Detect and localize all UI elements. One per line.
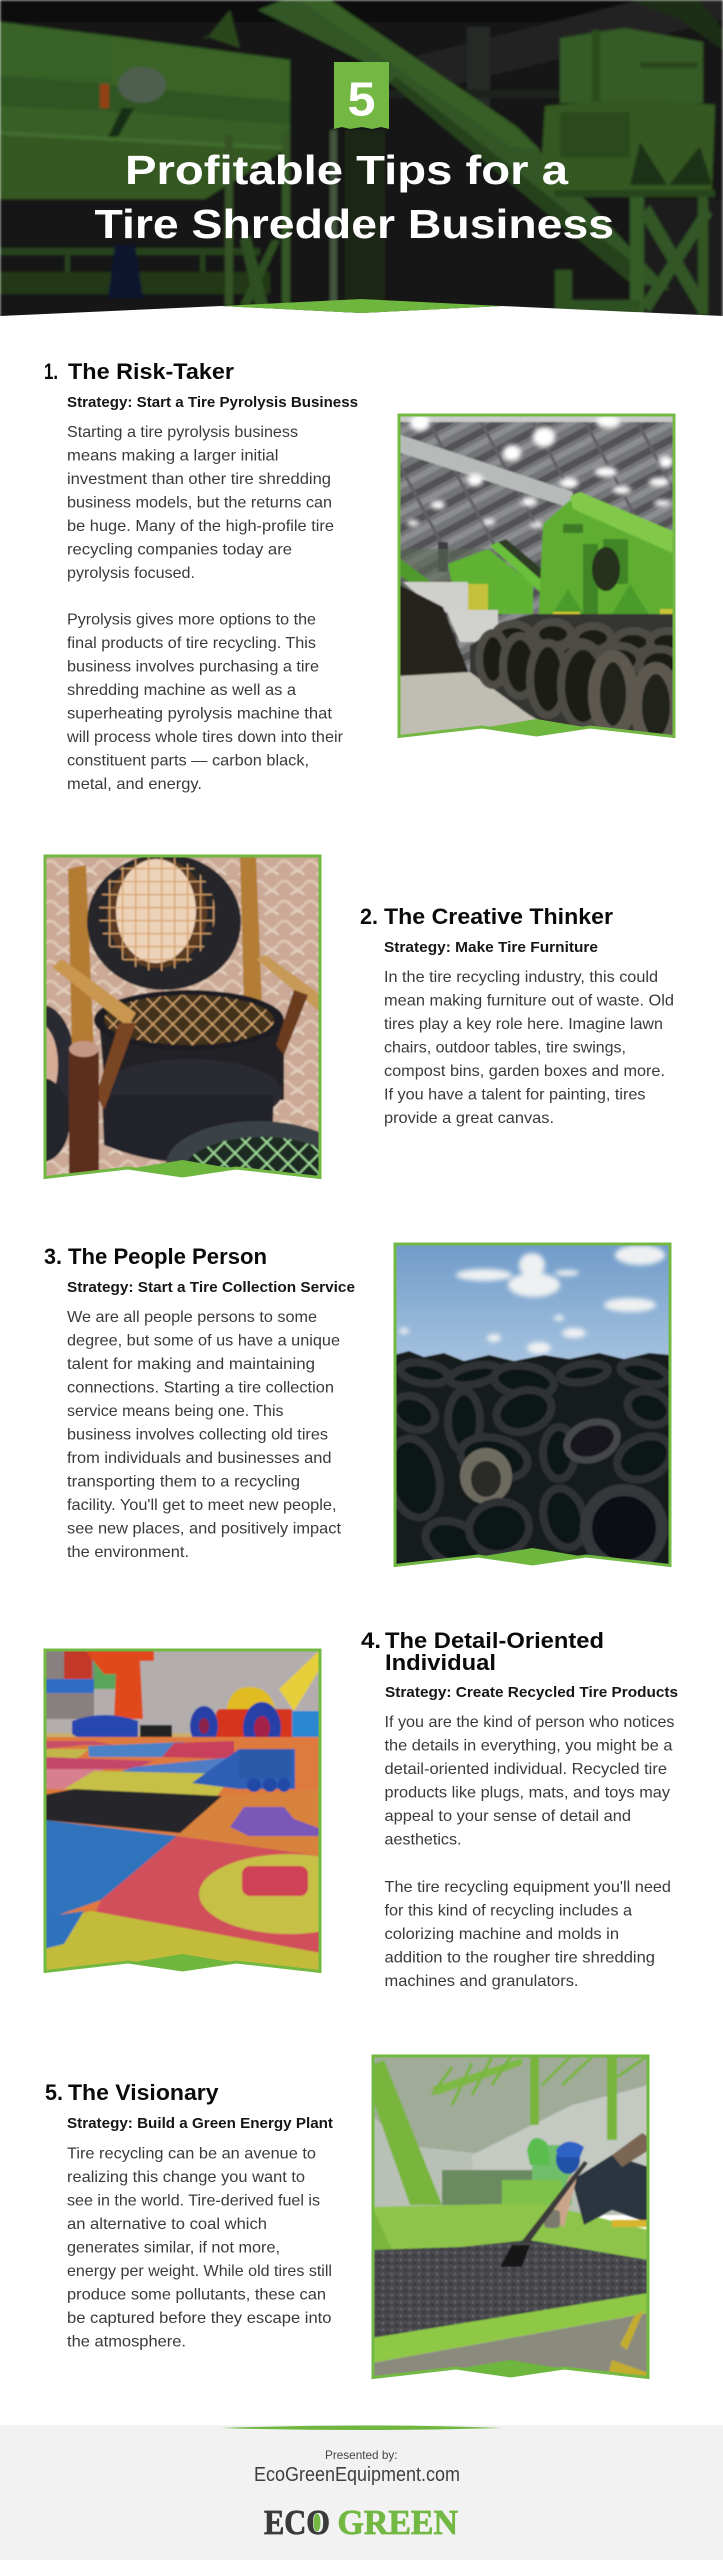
section 5 body text: be captured before they escape into bbox=[67, 2310, 332, 2327]
section 3 body text: transporting them to a recycling bbox=[67, 1474, 300, 1490]
section 2 heading: The Creative Thinker bbox=[384, 904, 613, 929]
section 5 strategy: Strategy: Build a Green Energy Plant bbox=[67, 2115, 333, 2132]
section 2: The Creative Thinker bbox=[44, 854, 673, 1180]
number badge: 5: 5 bbox=[348, 74, 376, 126]
website: EcoGreenEquipment.com bbox=[254, 2464, 460, 2486]
section 1 body text: metal, and energy. bbox=[67, 776, 202, 793]
photo 2: tire chair bbox=[44, 854, 322, 1180]
section 5 body text bbox=[67, 2146, 332, 2350]
section 2 body text: chairs, outdoor tables, tire swings, bbox=[384, 1040, 626, 1056]
section 1 body text: pyrolysis focused. bbox=[67, 565, 195, 582]
section 1 body text: final products of tire recycling. This bbox=[67, 635, 316, 652]
title: Tire Shredder Business bbox=[94, 201, 614, 247]
photo 4 frame bbox=[45, 1650, 320, 1972]
section 4 body text bbox=[384, 1714, 674, 1990]
section 4 body text: for this kind of recycling includes a bbox=[384, 1902, 632, 1920]
photo 5 frame bbox=[373, 2056, 648, 2378]
section 5 heading: 5. bbox=[45, 2080, 63, 2105]
logo: Eco Green bbox=[264, 2503, 458, 2542]
section 4 body text: products like plugs, mats, and toys may bbox=[384, 1784, 670, 1802]
section 1 body text: shredding machine as well as a bbox=[67, 682, 296, 699]
section 4 heading bbox=[361, 1628, 604, 1675]
section 1 body text bbox=[66, 424, 344, 793]
section 1 body text: business models, but the returns can bbox=[67, 494, 332, 512]
section 1 body text: superheating pyrolysis machine that bbox=[67, 706, 333, 722]
logo: Eco Green: ECO bbox=[264, 2503, 330, 2542]
section 3: The People Person bbox=[44, 1243, 678, 1574]
section 1 body text: be huge. Many of the high-profile tire bbox=[67, 518, 334, 535]
section 3 body text: see new places, and positively impact bbox=[67, 1520, 342, 1538]
section 1 body text: recycling companies today are bbox=[67, 542, 292, 558]
footer bbox=[0, 2425, 723, 2560]
section 3 body text: business involves collecting old tires bbox=[67, 1426, 328, 1444]
section 3 heading: The People Person bbox=[68, 1244, 267, 1269]
section 4 body text: aesthetics. bbox=[384, 1832, 462, 1848]
section 1 body text: will process whole tires down into their bbox=[66, 729, 344, 746]
section 3 body text: facility. You'll get to meet new people, bbox=[67, 1497, 336, 1514]
section 1 heading: 1. bbox=[44, 359, 58, 384]
section 5 heading: The Visionary bbox=[68, 2080, 219, 2105]
section 4 heading: 4. bbox=[361, 1628, 381, 1653]
footer accent bbox=[221, 2426, 502, 2430]
section 5 body text: energy per weight. While old tires still bbox=[67, 2263, 332, 2280]
section 2 heading: 2. bbox=[360, 904, 378, 929]
section 4 heading: Individual bbox=[385, 1650, 496, 1675]
photo 1: tire shredding plant bbox=[398, 414, 686, 744]
section 5: The Visionary bbox=[45, 2055, 649, 2379]
title: Profitable Tips for a bbox=[125, 147, 569, 193]
section 3 strategy: Strategy: Start a Tire Collection Service bbox=[67, 1279, 355, 1296]
photo 3 frame bbox=[395, 1244, 670, 1566]
section 3 body text: service means being one. This bbox=[67, 1403, 284, 1420]
section 2 body text: tires play a key role here. Imagine lawn bbox=[384, 1016, 663, 1033]
logo: Eco Green: GREEN bbox=[338, 2503, 458, 2542]
title bbox=[94, 147, 614, 247]
section 4 body text: machines and granulators. bbox=[384, 1973, 578, 1990]
section 3 body text: degree, but some of us have a unique bbox=[67, 1332, 340, 1350]
photo 4: recycled rubber play mats and toys bbox=[44, 1648, 322, 1974]
number badge: 5 bbox=[334, 62, 389, 129]
header photo: shredding machinery bbox=[0, 0, 723, 320]
header banner bbox=[0, 0, 723, 320]
section 3 body text: from individuals and businesses and bbox=[67, 1450, 332, 1467]
section 4 strategy: Strategy: Create Recycled Tire Products bbox=[385, 1684, 678, 1701]
section 2 body text: In the tire recycling industry, this could bbox=[384, 969, 658, 986]
section 3 body text: talent for making and maintaining bbox=[67, 1356, 315, 1373]
section 5 body text: produce some pollutants, these can bbox=[67, 2286, 326, 2304]
section 1 heading: The Risk-Taker bbox=[68, 359, 234, 384]
section 2 body text: If you have a talent for painting, tires bbox=[384, 1086, 646, 1104]
section 4: The Detail-Oriented Individual bbox=[44, 1628, 678, 1990]
photo 3: pile of tires under sky bbox=[381, 1243, 678, 1574]
section 1 strategy: Strategy: Start a Tire Pyrolysis Business bbox=[67, 394, 358, 411]
section 5 body text: Tire recycling can be an avenue to bbox=[67, 2146, 316, 2162]
section 1 body text: investment than other tire shredding bbox=[67, 471, 331, 488]
section 2 body text: mean making furniture out of waste. Old bbox=[384, 992, 674, 1010]
section 2 body text: compost bins, garden boxes and more. bbox=[384, 1063, 665, 1080]
section 1 body text: means making a larger initial bbox=[67, 448, 278, 464]
section 3 body text bbox=[67, 1309, 342, 1561]
section 2 body text bbox=[384, 969, 674, 1127]
header accent chevron bbox=[221, 299, 502, 313]
presented by: Presented by: bbox=[325, 2448, 398, 2462]
photo 1 frame bbox=[399, 415, 674, 736]
section 4 body text: The tire recycling equipment you'll need bbox=[384, 1879, 671, 1896]
section 5 body text: see in the world. Tire-derived fuel is bbox=[67, 2192, 320, 2210]
section 2 body text: provide a great canvas. bbox=[384, 1110, 554, 1127]
photo 2 frame bbox=[45, 856, 320, 1178]
section 5 body text: generates similar, if not more, bbox=[67, 2240, 280, 2256]
section 3 body text: connections. Starting a tire collection bbox=[67, 1380, 334, 1396]
section 4 body text: detail-oriented individual. Recycled tire bbox=[384, 1761, 667, 1778]
section 3 body text: the environment. bbox=[67, 1544, 189, 1561]
section 5 body text: an alternative to coal which bbox=[67, 2216, 267, 2233]
section 5 body text: the atmosphere. bbox=[67, 2334, 186, 2350]
section 4 body text: colorizing machine and molds in bbox=[384, 1926, 619, 1943]
section 4 heading: The Detail-Oriented bbox=[385, 1628, 604, 1653]
section 1 body text: Pyrolysis gives more options to the bbox=[67, 612, 316, 628]
section 1: The Risk-Taker bbox=[44, 359, 686, 793]
section 4 body text: the details in everything, you might be a bbox=[384, 1738, 673, 1754]
section 5 body text: realizing this change you want to bbox=[67, 2169, 305, 2186]
section 2 strategy: Strategy: Make Tire Furniture bbox=[384, 939, 598, 956]
section 3 heading: 3. bbox=[44, 1244, 62, 1269]
section 4 body text: addition to the rougher tire shredding bbox=[384, 1950, 655, 1966]
section 1 body text: Starting a tire pyrolysis business bbox=[67, 424, 298, 441]
section 4 body text: If you are the kind of person who notices bbox=[384, 1714, 674, 1731]
section 1 body text: constituent parts — carbon black, bbox=[67, 752, 309, 770]
section 1 body text: business involves purchasing a tire bbox=[67, 658, 319, 676]
section 3 body text: We are all people persons to some bbox=[67, 1309, 317, 1326]
photo 5: worker shoveling rubber mulch bbox=[372, 2055, 649, 2379]
section 4 body text: appeal to your sense of detail and bbox=[384, 1808, 631, 1825]
